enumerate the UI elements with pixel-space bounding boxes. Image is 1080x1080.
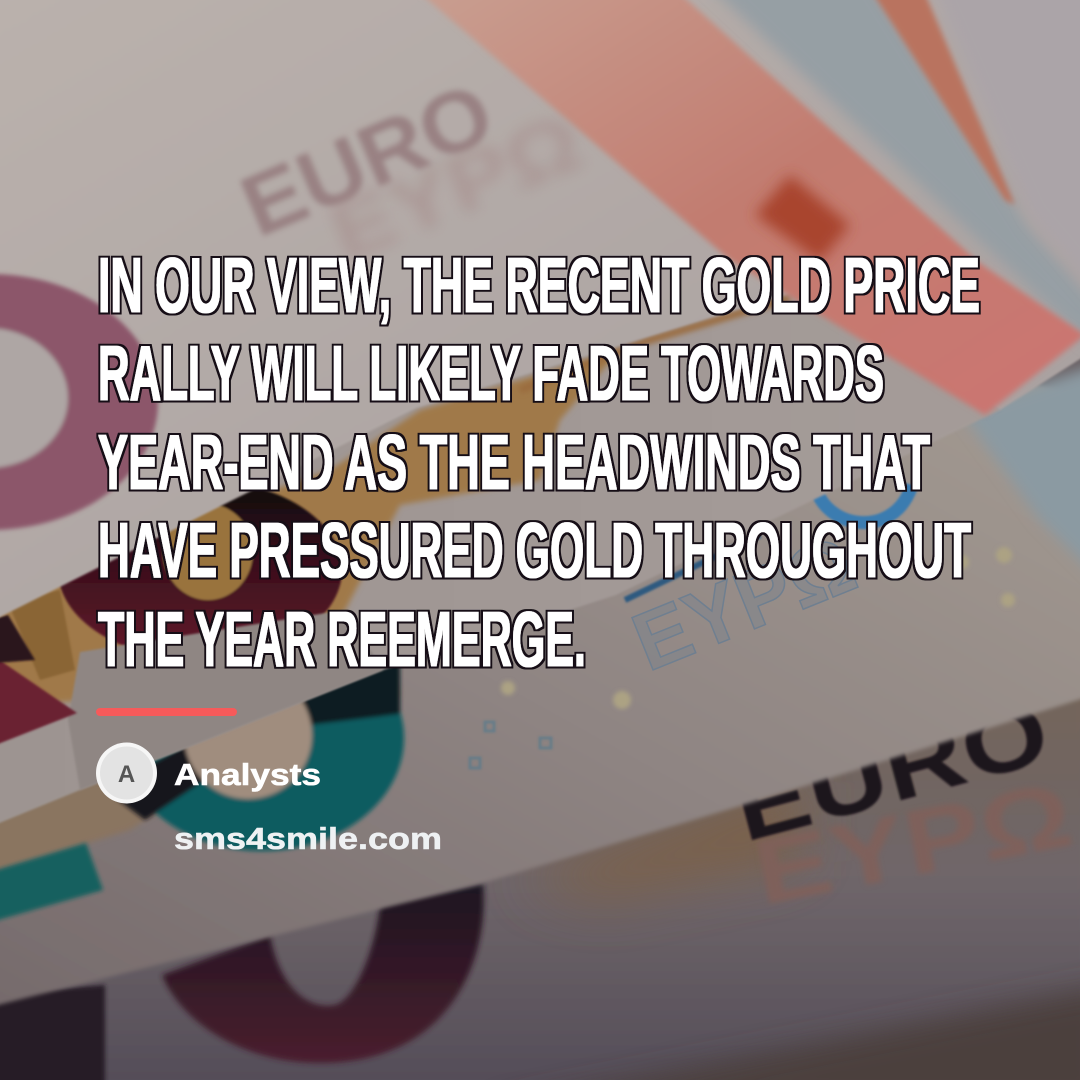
teal numeral bbox=[105, 625, 404, 851]
pink band bbox=[405, 0, 1080, 415]
avatar badge bbox=[96, 742, 157, 804]
headline: THE YEAR REEMERGE. bbox=[98, 595, 586, 683]
third banknote bbox=[0, 360, 1080, 1012]
EURO lettering, lower right bbox=[724, 680, 1080, 925]
bottom banknote bbox=[0, 600, 1080, 1080]
pale printed spots bbox=[501, 547, 1015, 709]
website: sms4smile.com bbox=[174, 821, 442, 856]
maroon numeral ring bbox=[58, 480, 342, 660]
accent divider bbox=[96, 708, 237, 716]
maroon numeral, upper left bbox=[0, 274, 158, 530]
blurred EURO lettering, top: EURO bbox=[228, 65, 507, 255]
bottom numeral bbox=[162, 883, 484, 1063]
crimson block bbox=[0, 640, 77, 755]
hatched EYPΩ lettering: ΕΥΡΩ bbox=[621, 518, 868, 689]
blurred EURO lettering, top bbox=[228, 65, 595, 279]
top banknote bbox=[0, 0, 1080, 632]
blue printed ring bbox=[815, 485, 912, 523]
teal block bbox=[0, 843, 103, 928]
avatar badge: A bbox=[118, 761, 135, 788]
author name: Analysts bbox=[174, 757, 321, 792]
small printed dots bbox=[470, 722, 551, 768]
EURO lettering, lower right: ΕΥΡΩ bbox=[746, 763, 1080, 925]
EURO lettering, lower right: EURO bbox=[724, 680, 1059, 861]
blurred EURO lettering, top: ΕΥΡΩ bbox=[318, 96, 595, 279]
headline bbox=[98, 241, 980, 683]
second banknote bbox=[0, 280, 1000, 835]
